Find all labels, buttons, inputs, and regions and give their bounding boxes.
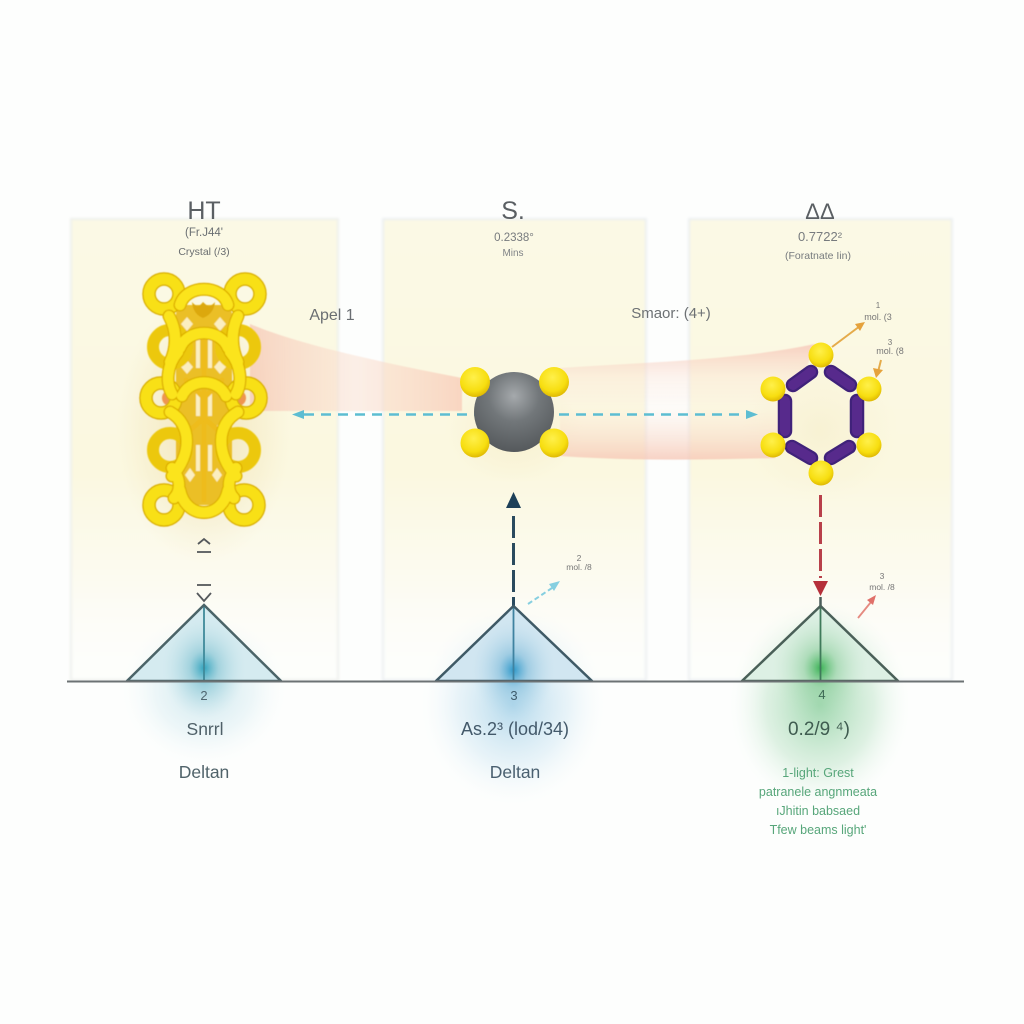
text block: left caption: Deltan [179,762,229,782]
panel: right column background [689,219,952,680]
arches [168,289,240,512]
orange glints [162,390,178,406]
heading: middle column: 0.2338° [494,232,534,244]
heading: left column: (Fr.J44' [185,227,223,239]
heading: right column: 0.7722² [798,229,843,244]
baseline axis [67,680,964,682]
triangle: left teal [127,605,281,718]
heading: left column [178,197,230,258]
callout: cyan dashed arrow with label 2 [528,553,592,604]
text block: middle caption [461,688,569,782]
light beam: sphere to hexagon [560,344,815,460]
icon: purple and yellow hexagon molecule [760,342,882,486]
text block: right caption: 1-light: Grest [782,766,854,780]
callout: red arrow with label 3 [858,571,895,618]
heading: left column: Crystal (/3) [178,246,230,258]
callout: orange arrow with label 3 [873,338,904,378]
text block: right caption: 0.2/9 ⁴) [788,719,850,740]
glow: under right triangle [730,600,910,810]
label: Smaor (4+): Smaor: (4+) [631,305,711,322]
center knot [192,302,215,318]
gold struts [186,340,222,500]
text block: left caption: Snrrl [187,719,223,739]
heading: left column: HT [187,197,221,225]
symbol: double chevron marks above left triangle [197,539,211,601]
heading: right column: (Foratnate Iin) [785,250,851,262]
text block: left caption: 2 [200,688,208,703]
shadow: hexagon [740,355,900,505]
corner and mid rings [146,279,261,520]
arrow: dark dashed up arrow [506,492,521,606]
triangle: right green [742,606,898,723]
glow: under middle triangle [421,605,605,805]
callout: orange arrow with label 3: mol. (8 [876,346,904,356]
panel: middle column background [383,219,646,680]
text block: right caption: Tfew beams light' [770,823,866,837]
callout: orange arrow with label 1 [832,301,892,347]
arrow: red dashed down arrow [813,495,828,606]
heading: right column [785,199,851,262]
shadow: sphere [444,375,584,485]
text block: middle caption: Deltan [490,762,540,782]
text block: middle caption: 3 [510,688,518,703]
callout: orange arrow with label 1: mol. (3 [864,312,892,322]
callout: orange arrow with label 1: 1 [876,301,881,310]
callout: cyan dashed arrow with label 2: 2 [577,553,582,563]
heading: middle column: Mins [502,248,524,259]
panel: left column background [71,219,338,680]
heading: right column: ΔΔ [805,199,835,224]
text block: left caption [179,688,229,782]
callout: red arrow with label 3: mol. /8 [869,582,895,592]
back rings [153,330,255,467]
gold core [176,305,232,505]
triangle: middle blue [436,606,592,720]
arrow: cyan dashed double arrow [292,410,758,419]
shadow: crystal [116,295,292,565]
heading: middle column [494,197,534,259]
callout: orange arrow with label 3: 3 [888,338,893,347]
icon: gray sphere with four yellow atoms [460,367,569,458]
cream gaps [178,317,228,482]
text block: right caption: patranele angnmeata [759,785,877,799]
text block: middle caption: As.2³ (lod/34) [461,719,569,739]
text block: right caption [759,687,877,837]
text block: right caption: 4 [818,687,826,702]
label: Apel 1: Apel 1 [309,307,355,324]
glow: under left triangle [122,615,286,765]
light beam: crystal to sphere [250,324,462,411]
callout: red arrow with label 3: 3 [880,571,885,581]
icon: yellow crystal lattice [146,279,261,520]
text block: right caption: ıJhitin babsaed [776,804,860,818]
callout: cyan dashed arrow with label 2: mol. /8 [566,562,592,572]
heading: middle column: S. [501,197,525,225]
